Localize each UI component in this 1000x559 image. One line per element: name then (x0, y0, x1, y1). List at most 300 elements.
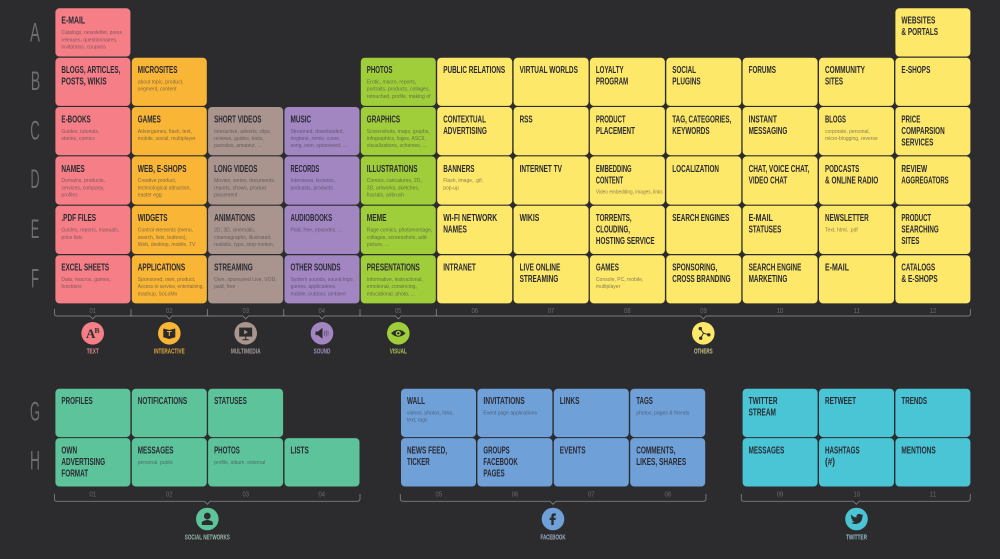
tile: live online streaming: STREAMING (520, 274, 558, 285)
top column numbers: 12 (930, 306, 936, 315)
tile: public relations (437, 58, 512, 106)
tile: e-shops (895, 58, 970, 106)
tile: comments, likes, shares: LIKES, SHARES (636, 457, 687, 468)
tile: e-mail: releases, questionnaires, (61, 37, 118, 43)
tile: names: services, company, (61, 185, 104, 191)
tile: names: profiles (61, 193, 78, 199)
tile: other sounds: games, applications, (290, 284, 337, 290)
tile: price comparsion services: SERVICES (901, 137, 934, 148)
tile: torrents, clouding, hosting service (590, 206, 665, 254)
column 03: multimedia tiles (208, 107, 283, 303)
tile: meme (361, 206, 436, 254)
tile: own advertising format: FORMAT (61, 468, 88, 480)
tile: tag, categories, keywords (666, 107, 741, 155)
tile: games: GAMES (596, 263, 619, 274)
tile: e-books: Guides, tutorials, (61, 129, 99, 135)
social networks numbers (89, 490, 325, 499)
tile: search engine marketing: SEARCH ENGINE (749, 263, 802, 274)
tile: graphics: visualizations, schemes, ... (367, 143, 427, 149)
tile: news feed, ticker: NEWS FEED, (407, 446, 447, 456)
tile: illustrations: Comics, caricatures, 2D, (367, 178, 422, 184)
tile: other sounds: System sounds, sound logo, (290, 277, 354, 283)
tile: news feed, ticker (401, 438, 476, 486)
tile: product searching sites: SEARCHING (901, 225, 939, 236)
tile: instant messaging: INSTANT (749, 114, 777, 125)
top column numbers: 05 (395, 306, 402, 315)
tile: animations: 2D, 3D, cinematic, (214, 228, 255, 234)
tile: graphics: GRAPHICS (367, 114, 400, 125)
tile: microsites: MICROSITES (138, 65, 178, 76)
tile: contextual advertising: CONTEXTUAL (443, 114, 486, 125)
tile: twitter stream: TWITTER (749, 396, 778, 407)
row letters: B (31, 66, 40, 96)
tile: retweet: RETWEET (825, 396, 856, 407)
tile: embedding content: Video embedding, images, links (596, 190, 663, 196)
tile: wall: WALL (407, 396, 425, 407)
tile: chat, voice chat, video chat: VIDEO CHAT (749, 175, 787, 186)
tile: newsletter: NEWSLETTER (825, 213, 869, 224)
tile: lists: LISTS (290, 446, 309, 456)
tile: banners (437, 156, 512, 205)
twitter numbers: 11 (930, 490, 936, 499)
tile: notifications (132, 389, 207, 437)
tile: audiobooks (284, 206, 360, 254)
icon: text category (81, 322, 104, 355)
tile: music: song, own, sponsored, ... (290, 143, 347, 149)
tile: chat, voice chat, video chat: CHAT, VOICE CHAT, (749, 164, 810, 175)
tile: hashtags: (#) (825, 457, 835, 468)
tile: product placement: PLACEMENT (596, 126, 635, 137)
tile: long videos: Movies, series, documents, (214, 178, 275, 184)
tile: virtual worlds (514, 58, 589, 106)
tile: applications: APPLICATIONS (138, 263, 185, 274)
tile: groups facebook pages: GROUPS (483, 446, 510, 456)
social networks numbers: 01 (89, 490, 96, 499)
tile: statuses (208, 389, 283, 437)
tile: groups facebook pages: FACEBOOK (483, 457, 518, 468)
tile: newsletter (819, 206, 894, 254)
icon: text category: B (94, 326, 100, 335)
tile: profiles: PROFILES (61, 396, 93, 407)
tile: games (590, 255, 665, 303)
top column numbers: 07 (548, 306, 554, 315)
tile: long videos: placement (214, 193, 238, 199)
top column numbers: 11 (853, 306, 860, 315)
row letters: C (30, 116, 40, 146)
tile: events: EVENTS (560, 446, 586, 456)
icon: sound category (311, 322, 333, 355)
row letters: E (31, 214, 39, 244)
row letters: F (31, 263, 39, 293)
tile: e-shops: E-SHOPS (901, 65, 931, 76)
tile: wikis (514, 206, 589, 254)
icon: text category: A (86, 326, 96, 341)
tile: photos: profile, album, external (214, 460, 265, 466)
row letters: A (30, 18, 40, 48)
tile: illustrations (361, 156, 436, 205)
tile: animations: ANIMATIONS (214, 213, 255, 224)
facebook bracket (400, 494, 706, 504)
tile: music: ringtone, remix, cover, (290, 136, 340, 142)
facebook numbers (435, 490, 671, 499)
tile: loyalty program: LOYALTY (596, 65, 624, 76)
facebook numbers: 08 (664, 490, 671, 499)
tile: audiobooks: AUDIOBOOKS (290, 213, 333, 224)
tile: e-mail (819, 255, 894, 303)
tile: games: Console, PC, mobile, (596, 277, 643, 283)
icon: twitter (845, 508, 868, 541)
tile: music: Streamed, downloaded, (290, 129, 344, 135)
tile: names (55, 156, 130, 205)
tile: streaming: STREAMING (214, 263, 253, 274)
tile: e-books (55, 107, 130, 155)
tile: hashtags: HASHTAGS (825, 446, 860, 456)
tile: catalogs and e-shops: CATALOGS (901, 263, 935, 274)
tile: e-mail: E-MAIL (61, 16, 85, 27)
icon: visual category: VISUAL (390, 348, 407, 355)
tile: microsites: segment, content (138, 87, 177, 93)
tile: records: podcasts, products (290, 185, 333, 191)
tile: illustrations: 3D, artworks, sketches, (367, 185, 419, 191)
tile: other sounds: mobile, outdoor, ambient (290, 291, 346, 297)
tile: wi-fi network names: WI-FI NETWORK (443, 213, 497, 224)
tile: wi-fi network names: NAMES (443, 225, 467, 236)
tile: excel sheets (55, 255, 130, 303)
tile: loyalty program (590, 58, 665, 106)
tile: blogs, articles (55, 58, 130, 106)
tile: localization: LOCALIZATION (672, 164, 719, 175)
tile: tags: TAGS (636, 396, 653, 407)
tile: audiobooks: Paid, free, episodes, ... (290, 228, 342, 234)
top column numbers: 10 (777, 306, 783, 315)
tile: product searching sites: PRODUCT (901, 213, 931, 224)
icon: others category: OTHERS (694, 348, 713, 355)
tile: short videos: parodies, amateur, ... (214, 143, 262, 149)
tile: games: mobile, social, multiplayer (138, 136, 196, 142)
facebook numbers: 07 (588, 490, 595, 499)
tile: product placement (590, 107, 665, 155)
tile: tags: photos, pages & friends (636, 410, 690, 416)
tile: search engines (666, 206, 741, 254)
tile: product searching sites (895, 206, 970, 254)
tile: presentations (361, 255, 436, 303)
tile: photos (208, 438, 283, 486)
tile: torrents, clouding, hosting service: HOSTING SERVICE (596, 236, 655, 247)
tile: applications (132, 255, 207, 303)
tile: blogs (819, 107, 894, 155)
tile: search engine marketing: MARKETING (749, 274, 787, 285)
tile: price comparsion services: PRICE (901, 114, 921, 125)
tile: applications: Access to service, entertaining, (138, 284, 204, 290)
tile: embedding content: CONTENT (596, 175, 623, 186)
row letters (30, 18, 40, 476)
tile: rss: RSS (520, 114, 533, 125)
tile: public relations: PUBLIC RELATIONS (443, 65, 506, 76)
icon: visual category (387, 322, 410, 355)
tile: widgets: Control elements (menu, (138, 228, 193, 234)
tile: statuses: STATUSES (214, 396, 247, 407)
tile: meme: picture, ... (367, 242, 389, 248)
tile: mentions: MENTIONS (901, 446, 936, 456)
tile: games: Advergames, flash, text, (138, 129, 192, 135)
tile: music (284, 107, 360, 155)
tile: e-mail (55, 8, 130, 57)
tile: photos (361, 58, 436, 106)
tile: streaming: Own, sponsored Live, VOD, (214, 277, 277, 283)
tile: long videos: LONG VIDEOS (214, 164, 258, 175)
tile: social plugins (666, 58, 741, 106)
tile: review aggregators: AGGREGATORS (901, 175, 949, 186)
top column numbers: 02 (166, 306, 173, 315)
tile: short videos: Interactive, adverts, clips, (214, 129, 271, 135)
tile: games: GAMES (138, 114, 161, 125)
tile: community sites (819, 58, 894, 106)
tile: presentations: educational, photo, ... (367, 291, 415, 297)
tile: social plugins: PLUGINS (672, 77, 701, 88)
tile: names: Domains, products, (61, 178, 105, 184)
tile: own advertising format: OWN (61, 446, 77, 456)
tile: internet tv (514, 156, 589, 205)
icon: social networks (185, 508, 230, 541)
tile: live online streaming (514, 255, 589, 303)
tile: records: Interviews, lectures, (290, 178, 335, 184)
tile: trends (895, 389, 970, 437)
tile: contextual advertising: ADVERTISING (443, 126, 487, 137)
tile: internet tv: INTERNET TV (520, 164, 562, 175)
top bracket (54, 309, 970, 319)
tile: retweet (819, 389, 894, 437)
tile: review aggregators: REVIEW (901, 164, 928, 175)
column 05: visual tiles (361, 58, 436, 303)
tile: applications: Sponsored, own, product, (138, 277, 195, 283)
social networks bracket (54, 494, 360, 504)
icon: multimedia category: MULTIMEDIA (231, 348, 261, 355)
tile: events (554, 438, 629, 486)
tile: wi-fi network names (437, 206, 512, 254)
icon: text category: TEXT (87, 348, 99, 355)
tile: photos: retouched, profile, making of (367, 94, 431, 100)
tile: podcasts and online radio (819, 156, 894, 205)
columns 06-12: other tiles (437, 8, 970, 303)
periodic table infographic: G (30, 397, 40, 427)
tile: web, e-shops: easter egg (138, 193, 162, 199)
twitter numbers (777, 490, 936, 499)
tile: e-mail: invitations, coupons (61, 44, 106, 50)
tile: streaming: paid, free (214, 284, 235, 290)
tile: photos: PHOTOS (214, 446, 240, 456)
tile: lists (284, 438, 360, 486)
tile: excel sheets: EXCEL SHEETS (61, 263, 109, 274)
tile: product placement: PRODUCT (596, 114, 626, 125)
tile: pdf files (55, 206, 130, 254)
tile: long videos (208, 156, 283, 205)
tile: rss (514, 107, 589, 155)
panel: twitter (741, 389, 970, 541)
tile: tag, categories, keywords: TAG, CATEGORIES, (672, 114, 731, 125)
tile: banners: pop-up (443, 185, 459, 191)
tile: microsites: about topic, product, (138, 80, 184, 86)
tile: web, e-shops: technological attraction, (138, 185, 191, 191)
top column numbers: 04 (319, 306, 325, 315)
tile: podcasts and online radio: PODCASTS (825, 164, 860, 175)
tile: long videos: reports, shows, product (214, 185, 267, 191)
tile: widgets (132, 206, 207, 254)
tile: e-mail: Catalogs, newsletter, press (61, 30, 122, 36)
social networks numbers: 02 (166, 490, 173, 499)
tile: instant messaging: MESSAGING (749, 126, 787, 137)
tile: e-mail statuses (743, 206, 818, 254)
tile: comments, likes, shares: COMMENTS, (636, 446, 676, 456)
tile: animations: realistic, typo, stop-motion, (214, 242, 274, 248)
tile: own advertising format: ADVERTISING (61, 457, 105, 468)
tile: links: LINKS (560, 396, 580, 407)
tile: live online streaming: LIVE ONLINE (520, 263, 561, 274)
tile: pdf files: price lists (61, 235, 83, 241)
tile: animations: cinemagraphs, illustrated, (214, 235, 272, 241)
facebook numbers: 05 (435, 490, 442, 499)
tile: hashtags (819, 438, 894, 486)
twitter bracket (741, 494, 970, 504)
panel: facebook (400, 389, 706, 541)
social networks numbers: 03 (242, 490, 249, 499)
icon: social networks: SOCIAL NETWORKS (185, 534, 230, 541)
column 01: text tiles (55, 8, 130, 303)
tile: presentations: PRESENTATIONS (367, 263, 420, 274)
tile: price comparsion services (895, 107, 970, 155)
tile: torrents, clouding, hosting service: TORRENTS, (596, 213, 632, 224)
row letters: H (30, 446, 40, 476)
tile: web, e-shops: WEB, E-SHOPS (138, 164, 187, 175)
tile: presentations: Informative, instructional, (367, 277, 423, 283)
tile: review aggregators (895, 156, 970, 205)
tile: banners: Flash, image, .gif, (443, 178, 483, 184)
tile: own advertising format (55, 438, 130, 486)
tile: short videos (208, 107, 283, 155)
tile: blogs, articles: BLOGS, ARTICLES, (61, 65, 121, 76)
tile: trends: TRENDS (901, 396, 927, 407)
tile: blogs, articles: POSTS, WIKIS (61, 77, 107, 88)
twitter numbers: 10 (853, 490, 860, 499)
tile: forums: FORUMS (749, 65, 776, 76)
tile: embedding content (590, 156, 665, 205)
tile: torrents, clouding, hosting service: CLOUDING, (596, 225, 630, 236)
tile: other sounds (284, 255, 360, 303)
icon: twitter: TWITTER (846, 534, 867, 541)
column 04: sound tiles (284, 107, 360, 303)
tile: excel sheets: Data, macros, games, (61, 277, 111, 283)
social networks numbers: 04 (319, 490, 325, 499)
tile: search engines: SEARCH ENGINES (672, 213, 730, 224)
tile: product searching sites: SITES (901, 236, 920, 247)
icon: multimedia category (231, 322, 261, 355)
icon: interactive category: INTERACTIVE (154, 348, 185, 355)
tile: meme: MEME (367, 213, 387, 224)
twitter numbers: 09 (777, 490, 783, 499)
top column numbers: 08 (624, 306, 631, 315)
tile: games: multiplayer (596, 284, 621, 290)
tile: websites and portals: WEBSITES (901, 16, 936, 27)
tile: blogs: corporate, personal, (825, 129, 870, 135)
tile: streaming (208, 255, 283, 303)
tile: sponsoring, cross branding: CROSS BRANDING (672, 274, 731, 285)
top column numbers (89, 306, 936, 315)
icon: interactive category (154, 322, 185, 355)
tile: messages: MESSAGES (138, 446, 174, 456)
tile: short videos: SHORT VIDEOS (214, 114, 262, 125)
tile: catalogs and e-shops: & E-SHOPS (901, 274, 938, 285)
tile: notifications: NOTIFICATIONS (138, 396, 187, 407)
tile: web, e-shops (132, 156, 207, 205)
tile: twitter stream (743, 389, 818, 437)
tile: comments, likes, shares (630, 438, 705, 486)
row letters: D (30, 164, 40, 194)
tile: web, e-shops: Creative product, (138, 178, 176, 184)
tile: illustrations: ILLUSTRATIONS (367, 164, 418, 175)
tile: microsites (132, 58, 207, 106)
tile: illustrations: fractals, airbrush (367, 193, 404, 199)
column 02: interactive tiles (132, 58, 207, 303)
tile: messages (132, 438, 207, 486)
tile: photos: portraits, products, collages, (367, 87, 430, 93)
tile: graphics: infographics, logos, ASCII, (367, 136, 426, 142)
tile: messages: personal, public (138, 460, 174, 466)
tile: sponsoring, cross branding (666, 255, 741, 303)
tile: price comparsion services: COMPARSION (901, 126, 945, 137)
tile: sponsoring, cross branding: SPONSORING, (672, 263, 717, 274)
tile: invitations (477, 389, 552, 437)
tile: pdf files: Guides, reports, manuals, (61, 228, 119, 234)
tile: music: MUSIC (290, 114, 311, 125)
tile: invitations: INVITATIONS (483, 396, 525, 407)
tile: profiles (55, 389, 130, 437)
tile: podcasts and online radio: & ONLINE RADIO (825, 175, 879, 186)
tile: e-books: stories, comics (61, 136, 95, 142)
tile: widgets: WIDGETS (138, 213, 168, 224)
tile: wall (401, 389, 476, 437)
tile: groups facebook pages (477, 438, 552, 486)
tile: catalogs and e-shops (895, 255, 970, 303)
icon: facebook (540, 508, 566, 541)
tile: meme: collages, screenshots, add (367, 235, 427, 241)
tile: community sites: SITES (825, 77, 843, 88)
tile: tags (630, 389, 705, 437)
tile: twitter stream: STREAM (749, 408, 776, 419)
tile: games (132, 107, 207, 155)
tile: mentions (895, 438, 970, 486)
tile: widgets: search, lists, buttons), (138, 235, 187, 241)
tile: e-mail statuses: STATUSES (749, 225, 782, 236)
tile: animations (208, 206, 283, 254)
top column numbers: 01 (89, 306, 96, 315)
tile: intranet (437, 255, 512, 303)
top column numbers: 03 (242, 306, 249, 315)
tile: contextual advertising (437, 107, 512, 155)
tile: excel sheets: functions (61, 284, 82, 290)
tile: e-mail statuses: E-MAIL (749, 213, 773, 224)
tile: wikis: WIKIS (520, 213, 540, 224)
tile: instant messaging (743, 107, 818, 155)
tile: intranet: INTRANET (443, 263, 476, 274)
tile: blogs: micro-blogging, reverse (825, 136, 878, 142)
tile: virtual worlds: VIRTUAL WORLDS (520, 65, 578, 76)
tile: widgets: Web, desktop, mobile, TV (138, 242, 196, 248)
icon: facebook: FACEBOOK (540, 534, 566, 541)
tile: messages (743, 438, 818, 486)
tile: short videos: reviews, guides, tests, (214, 136, 264, 142)
tile: forums (743, 58, 818, 106)
tile: graphics: Screenshots, maps, graphs, (367, 129, 430, 135)
top column numbers: 09 (700, 306, 707, 315)
